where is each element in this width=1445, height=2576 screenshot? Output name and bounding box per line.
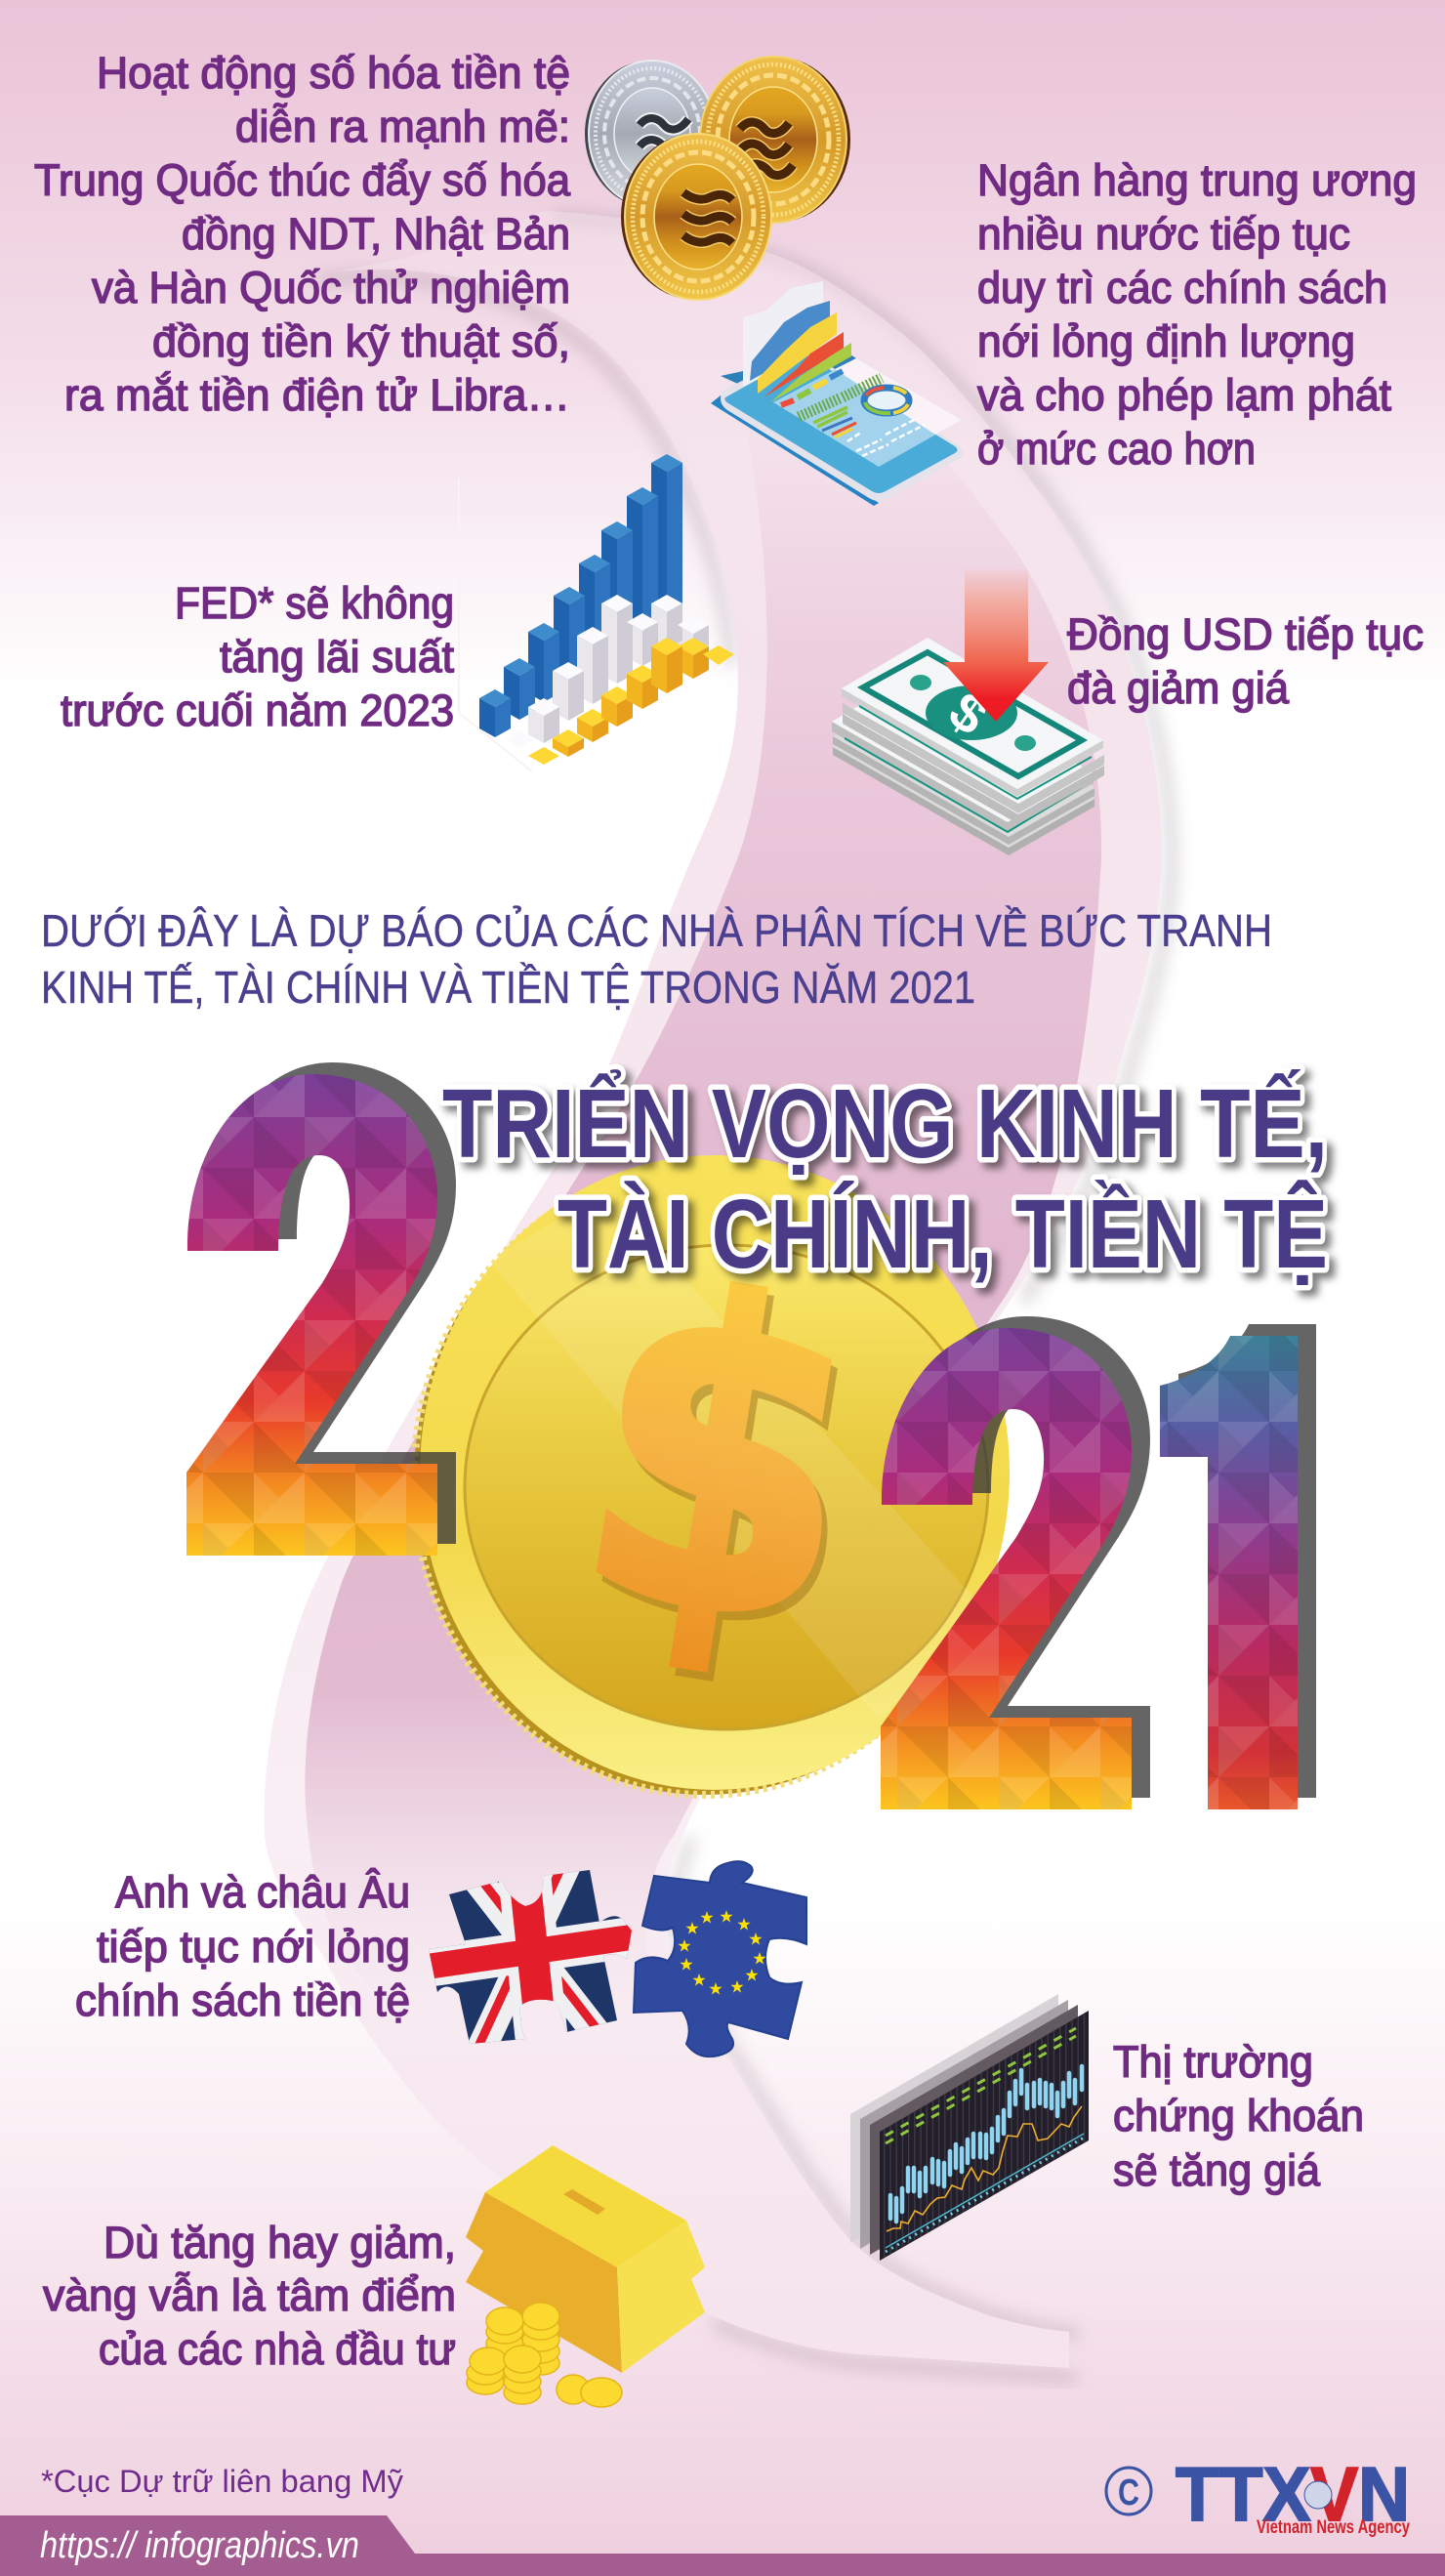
text: FED: trước cuối năm 2023 [61,686,454,735]
text: central banks: nới lỏng định lượng [977,316,1355,366]
text: digitalisation: đồng NDT, Nhật Bản [182,209,570,259]
text: digitalisation [34,48,571,420]
text: central banks: nhiều nước tiếp tục [977,209,1350,259]
text: central banks: và cho phép lạm phát [977,370,1391,420]
text: digitalisation: diễn ra mạnh mẽ: [235,102,570,151]
icon: gold bars and coins [466,2145,705,2407]
text: stock market: Thị trường [1113,2037,1313,2087]
icon: UK puzzle piece [429,1870,632,2044]
text: gold [43,2218,456,2374]
text: stock market [1113,2037,1364,2195]
text: gold: của các nhà đầu tư [99,2324,456,2374]
logo: TTXVN: TTXVN [1176,2451,1410,2537]
text: FED: tăng lãi suất [220,632,454,682]
text: central banks: duy trì các chính sách [977,263,1387,312]
footnote: *Cục Dự trữ liên bang Mỹ [41,2464,403,2499]
gold coin stacks [467,2303,622,2407]
big number 1 [1160,1324,1316,1809]
text: FED [61,578,454,735]
text: digitalisation: đồng tiền kỹ thuật số, [152,316,570,366]
text: central banks: Ngân hàng trung ương [977,155,1417,205]
area chart [743,281,851,402]
text: UK and Europe: tiếp tục nới lỏng [97,1922,410,1972]
ribbon dark band [305,410,1101,2012]
copyright sign: C [1118,2472,1139,2514]
text: gold: vàng vẫn là tâm điểm [43,2270,456,2320]
text: digitalisation: Hoạt động số hóa tiền tệ [97,48,570,98]
text: digitalisation: Trung Quốc thúc đẩy số hóa [34,155,571,205]
text: USD: Đồng USD tiếp tục [1067,609,1424,659]
text: gold: Dù tăng hay giảm, [103,2218,456,2267]
copyright sign [1106,2468,1151,2514]
footer bar: https:// infographics.vn [40,2525,359,2566]
icon: phone with charts [711,281,963,506]
icon: crypto coins [585,57,850,300]
donut chart [864,388,909,413]
text: USD: đà giảm giá [1067,663,1290,713]
gold coin [414,1155,1010,1795]
icon: isometric bar chart [459,454,734,771]
text: digitalisation: và Hàn Quốc thử nghiệm [92,263,570,312]
gold coin front [621,134,771,300]
big number 2 [186,1062,456,1556]
text: UK and Europe: chính sách tiền tệ [75,1975,410,2025]
text: central banks [977,155,1417,474]
EU stars [678,1910,766,1995]
subtitle: KINH TẾ, TÀI CHÍNH VÀ TIỀN TỆ TRONG NĂM 2021 [41,962,975,1013]
footer bar [0,2515,1445,2576]
text: central banks: ở mức cao hơn [977,424,1256,474]
subtitle: DƯỚI ĐÂY LÀ DỰ BÁO CỦA CÁC NHÀ PHÂN TÍCH VỀ BỨC TRANH [41,905,1272,956]
text: UK and Europe: Anh và châu Âu [115,1867,410,1917]
text: digitalisation: ra mắt tiền điện tử Libra… [64,370,570,420]
title [442,1069,1328,1289]
text: FED: FED* sẽ không [175,578,454,628]
big number 2 right [881,1316,1150,1809]
gold coin: $ [553,1199,889,1723]
icon: EU puzzle piece [634,1861,806,2057]
icon: stock chart screen [850,1994,1089,2261]
text: UK and Europe [75,1867,410,2025]
subtitle [41,905,1272,1013]
gold coin back [700,57,850,223]
silver coin [585,61,716,207]
icon: money stack: $ [938,679,999,747]
gold coin: $ [558,1208,895,1731]
text: stock market: sẽ tăng giá [1113,2145,1321,2195]
arrow: red down [943,569,1049,722]
text: stock market: chứng khoán [1113,2091,1364,2140]
text: USD [1067,609,1424,713]
icon: money stack [832,638,1104,855]
swirling ribbon [265,211,1172,2378]
